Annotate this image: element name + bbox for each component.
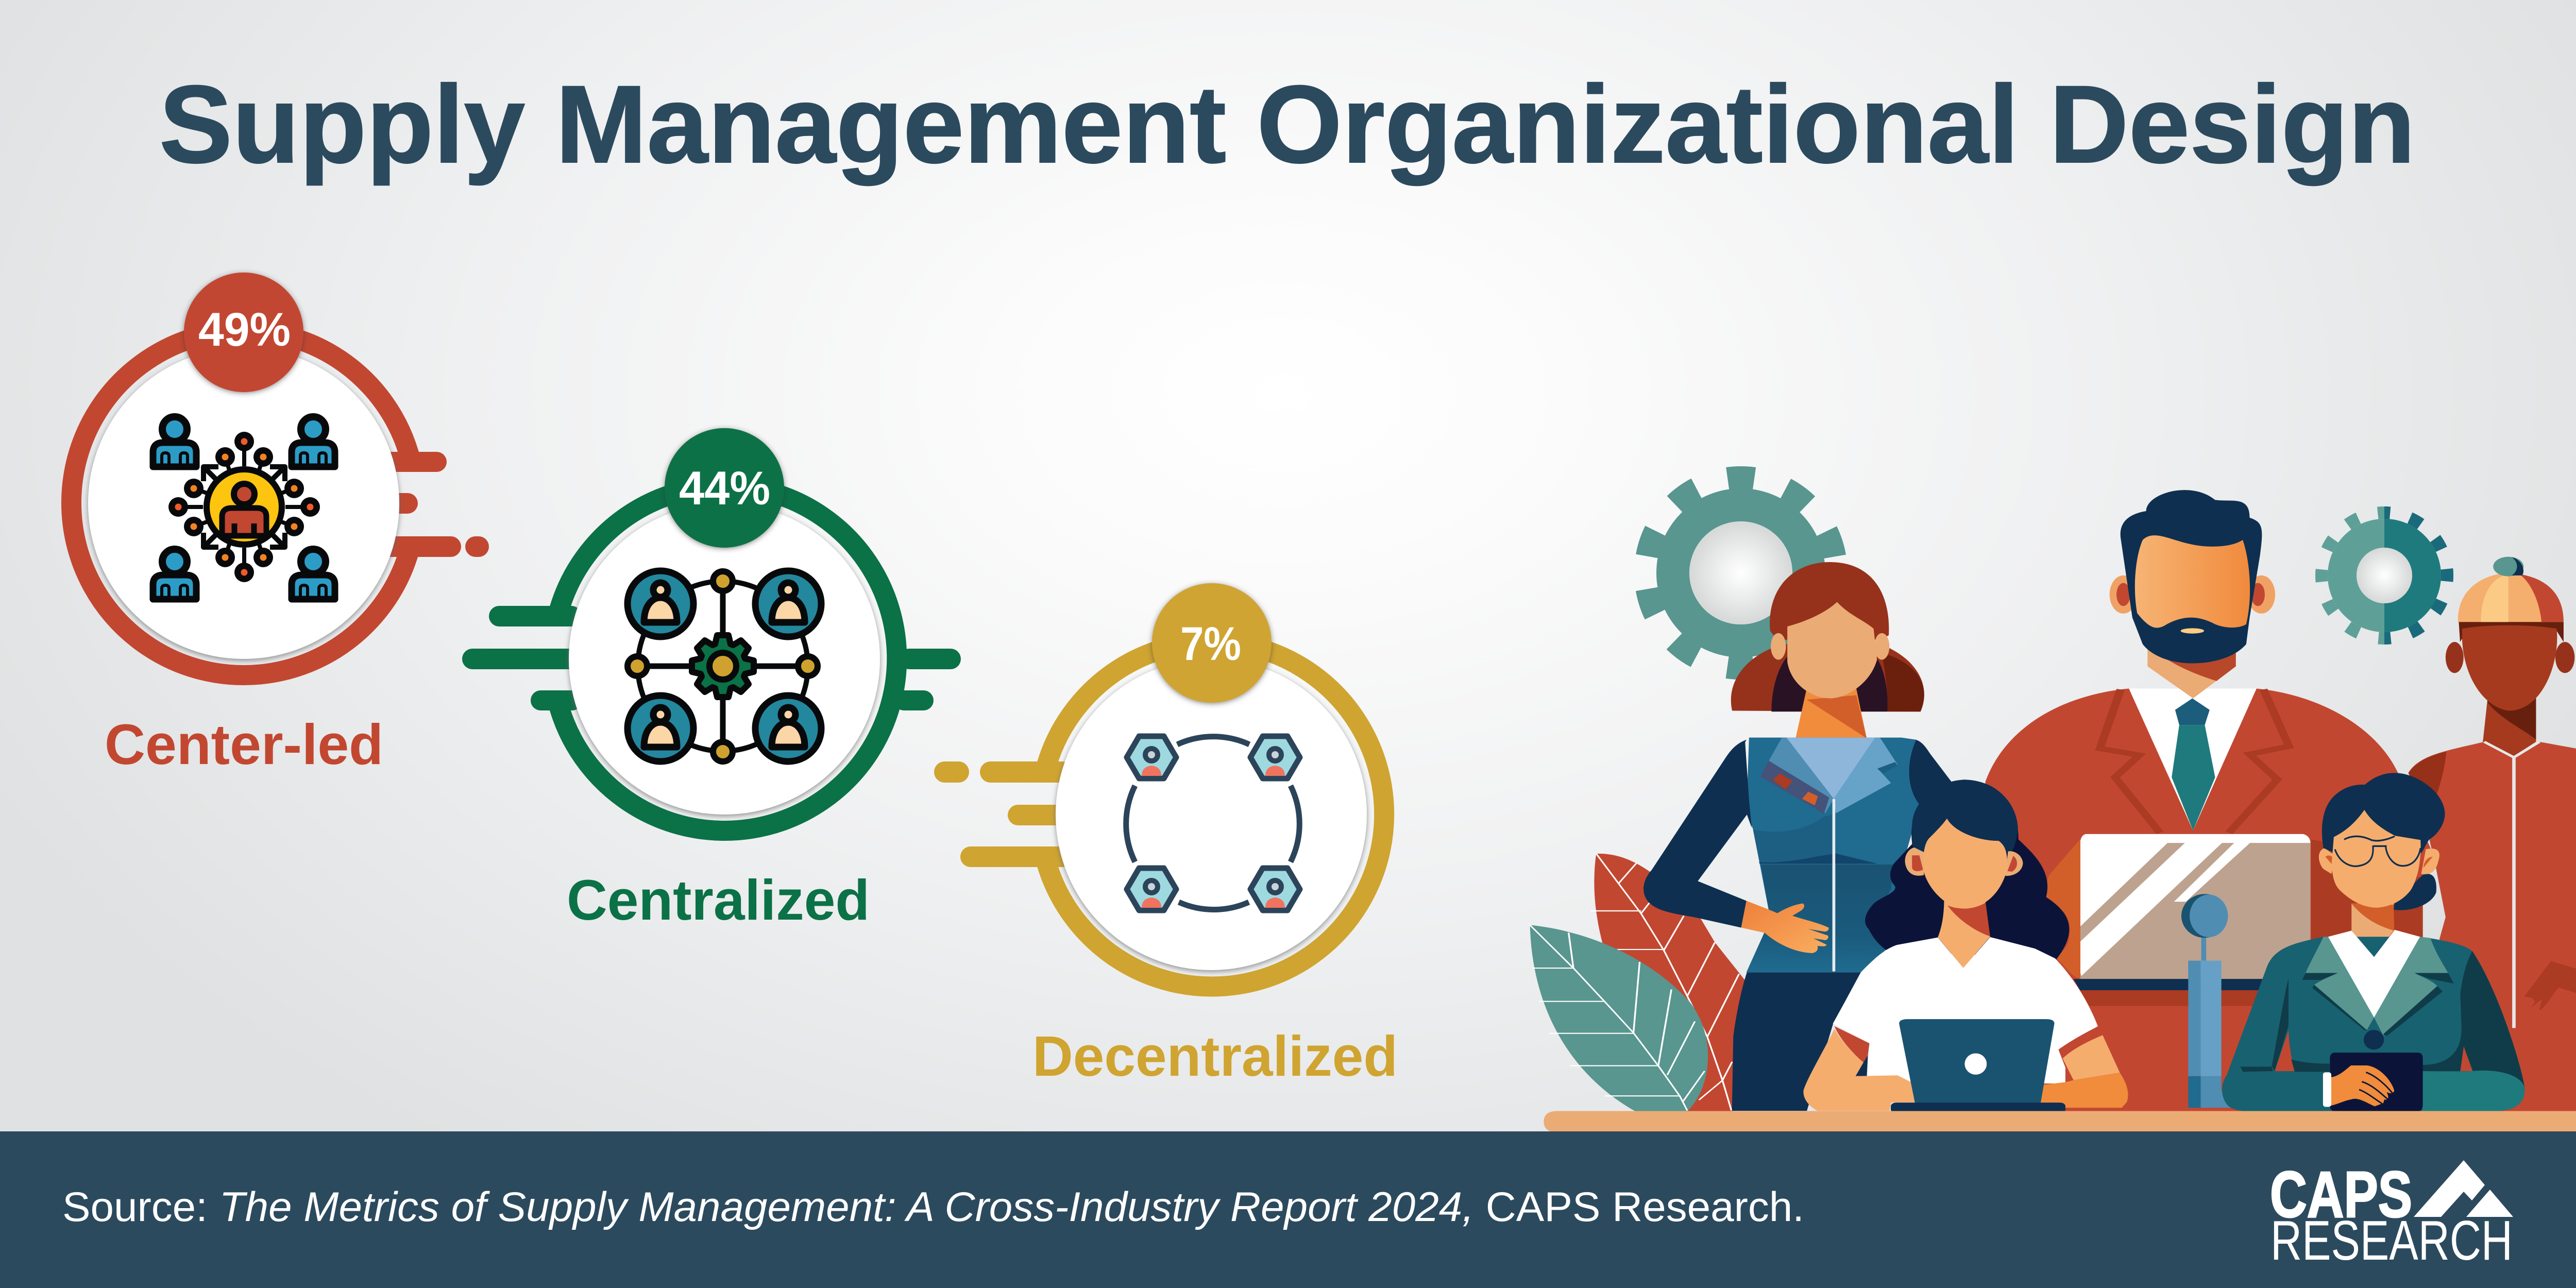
worker in cap — [2409, 557, 2576, 1114]
label: Centralized: Centralized — [567, 869, 870, 932]
badge: 49% — [184, 273, 303, 392]
badge: 49%: 49% — [198, 303, 291, 356]
white disc: centralized — [569, 503, 880, 815]
logo: CAPS Research — [2270, 1158, 2513, 1272]
logo: CAPS Research: RESEARCH — [2270, 1209, 2513, 1272]
leaf: red — [1591, 854, 1745, 1112]
ring and speed bars: decentralized — [934, 642, 1384, 987]
source text: Source: The Metrics of Supply Management: A Cross-Industry Report 2024, CAPS Research. — [62, 1184, 1804, 1230]
badge: 7% — [1152, 583, 1272, 703]
woman standing — [1643, 562, 1952, 1111]
badge: 44%: 44% — [679, 462, 770, 515]
leaf: green — [1530, 925, 1708, 1111]
desk — [1544, 1111, 2576, 1132]
ring and speed bars: centralized — [462, 486, 961, 831]
woman with glasses — [2222, 773, 2524, 1111]
right arm: seated woman — [2039, 1026, 2128, 1108]
left arm: seated woman — [1803, 1026, 1914, 1111]
logo: CAPS Research: CAPS — [2270, 1158, 2412, 1231]
panel: centralized — [462, 428, 961, 932]
hair back: seated woman — [1865, 781, 2069, 959]
panel: decentralized — [934, 583, 1398, 1088]
white disc: decentralized — [1056, 659, 1367, 970]
icon: hub with gear and four people — [628, 571, 821, 761]
icon: mountain peaks — [2414, 1160, 2513, 1217]
microphone — [2181, 894, 2232, 1108]
white disc: center-led — [88, 348, 399, 659]
head: seated woman — [1905, 779, 2023, 968]
man in red suit — [1977, 490, 2460, 1114]
head and hair: standing woman — [1731, 562, 1924, 738]
badge: 7%: 7% — [1180, 618, 1241, 670]
illustration: team of workers — [1530, 490, 2576, 1132]
label: Center-led: Center-led — [105, 713, 383, 776]
shirt: seated woman — [1833, 937, 2098, 1083]
panel: center-led — [71, 273, 489, 776]
label: Decentralized: Decentralized — [1032, 1025, 1398, 1088]
laptop — [1891, 1019, 2065, 1113]
icon: four hexagon nodes on a ring — [1126, 736, 1300, 910]
woman with laptop — [1803, 779, 2128, 1113]
icon: small gear — [2315, 506, 2453, 645]
badge: 44% — [665, 428, 784, 548]
icon: large gear — [1633, 465, 1849, 681]
ring and speed bars: center-led — [71, 331, 489, 675]
title: Supply Management Organizational Design — [159, 63, 2415, 186]
presentation screen — [2046, 834, 2311, 1006]
icon: central person with network — [153, 417, 335, 599]
torso: standing woman — [1643, 738, 1952, 1111]
footer bar — [0, 1131, 2576, 1288]
